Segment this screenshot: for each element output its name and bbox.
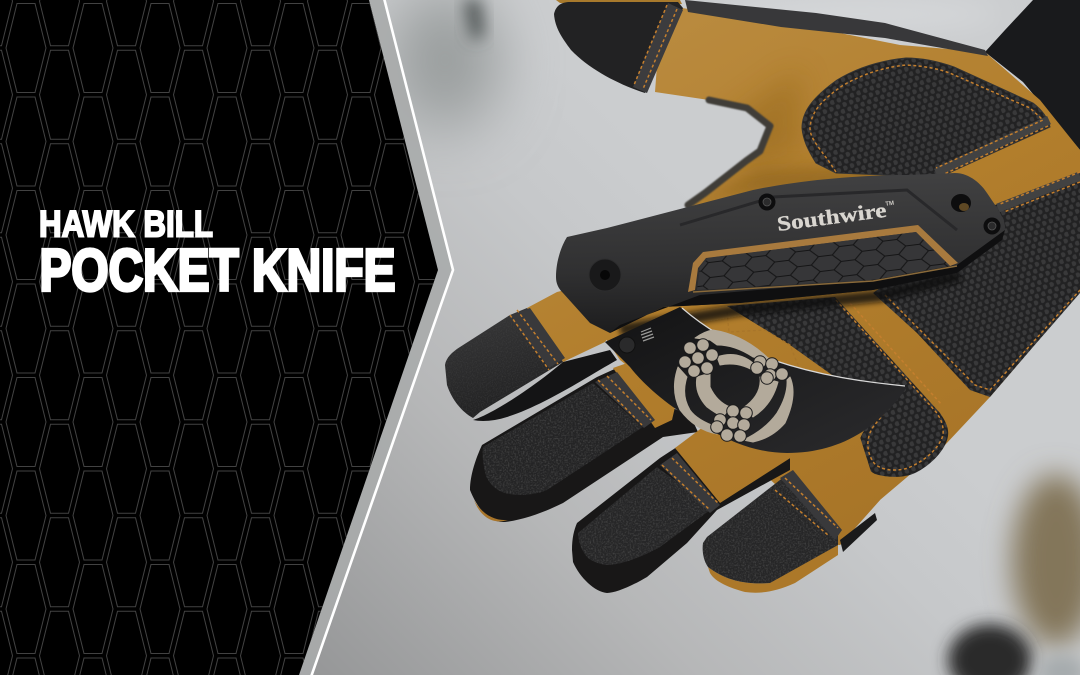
thumb seam bbox=[633, 3, 683, 93]
web seam bbox=[688, 100, 770, 205]
chevron band and white line bbox=[299, 0, 454, 675]
rear screw bbox=[984, 218, 1000, 234]
blade spine highlight bbox=[682, 308, 905, 386]
photo background bbox=[290, 0, 1080, 675]
palm pad stitching bbox=[810, 65, 1048, 176]
central pad stitching bbox=[836, 300, 943, 470]
index finger bbox=[445, 290, 617, 421]
middle finger bbox=[470, 362, 698, 522]
hexagon grip bbox=[697, 232, 950, 290]
pivot rivet bbox=[619, 337, 635, 353]
top screw bbox=[758, 194, 776, 210]
handle bbox=[556, 173, 1005, 333]
central round pad bbox=[727, 297, 948, 477]
palm pad bbox=[802, 58, 1050, 177]
title line 2: POCKET KNIFE bbox=[40, 238, 396, 304]
brand logo: Southwire bbox=[776, 198, 888, 236]
lower black edge bbox=[610, 230, 1005, 333]
right pad seam and stitching bbox=[998, 176, 1080, 208]
knife bbox=[556, 173, 1005, 453]
suede sliver on thumb bbox=[556, 0, 682, 4]
ring finger bbox=[572, 427, 795, 593]
tan lower line bbox=[693, 266, 957, 292]
title bbox=[39, 202, 396, 304]
blade bbox=[605, 307, 907, 453]
pivot screw bbox=[589, 259, 621, 291]
etched emblem bbox=[674, 330, 793, 442]
lanyard hole bbox=[951, 194, 971, 212]
title line 1: HAWK BILL bbox=[39, 202, 213, 244]
handle facet bbox=[680, 190, 957, 230]
knife shadow on glove bbox=[620, 276, 960, 330]
emblem clusters bbox=[679, 339, 788, 442]
right pad bbox=[873, 172, 1080, 397]
palm shading bbox=[709, 81, 882, 200]
thumb top band bbox=[685, 0, 988, 56]
glove: hand and thumb bbox=[554, 0, 1080, 545]
little finger bbox=[703, 437, 880, 593]
wrist cuff bbox=[985, 0, 1080, 150]
brand logo: TM bbox=[885, 201, 894, 208]
palm suede bbox=[600, 8, 1080, 545]
blade stamp bbox=[641, 328, 654, 341]
palm pad seam bbox=[936, 120, 1049, 173]
black chevron panel with hexagon pattern bbox=[0, 0, 438, 675]
thumb tip bbox=[554, 2, 683, 93]
tan grip inlay bbox=[688, 225, 958, 292]
